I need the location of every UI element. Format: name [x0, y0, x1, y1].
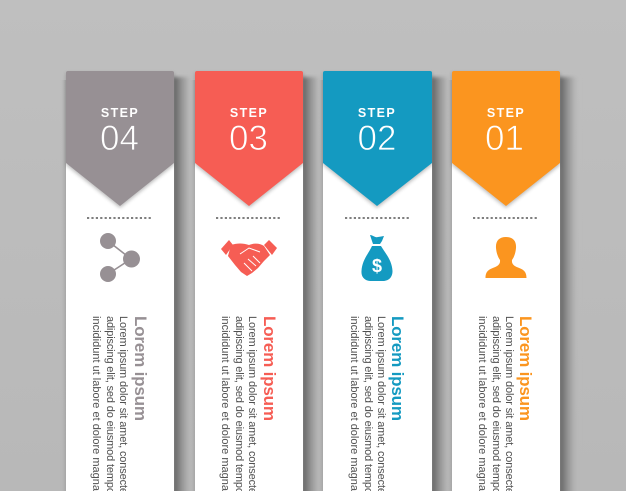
body text: adipiscing elit, sed do eiusmod tempo [490, 316, 502, 491]
body text [90, 316, 129, 491]
body text: incididunt ut labore et dolore magna [476, 316, 488, 491]
body text [219, 316, 258, 491]
panel: step 03 [189, 71, 322, 491]
body text [476, 316, 515, 491]
body text: adipiscing elit, sed do eiusmod tempo [362, 316, 374, 491]
step number: 04 [100, 119, 139, 158]
heading: Lorem ipsum [388, 316, 407, 421]
banner [195, 71, 303, 206]
step label: STEP [487, 106, 525, 120]
step label: STEP [358, 106, 396, 120]
step label: STEP [230, 106, 268, 120]
body text: adipiscing elit, sed do eiusmod tempo [104, 316, 116, 491]
step number: 01 [485, 119, 524, 158]
body text: incididunt ut labore et dolore magna [90, 316, 102, 491]
icon: handshake [221, 240, 277, 276]
icon: money bag: $ [372, 256, 382, 276]
panel: step 04 [60, 71, 193, 491]
banner [66, 71, 174, 206]
body text: Lorem ipsum dolor sit amet, consecte [117, 316, 129, 491]
step number: 03 [229, 119, 268, 158]
body text: incididunt ut labore et dolore magna [219, 316, 231, 491]
body text: incididunt ut labore et dolore magna [348, 316, 360, 491]
heading: Lorem ipsum [516, 316, 535, 421]
step label: STEP [101, 106, 139, 120]
step number: 02 [358, 119, 396, 158]
body text [348, 316, 387, 491]
banner [452, 71, 560, 206]
body text: Lorem ipsum dolor sit amet, consecte [503, 316, 515, 491]
heading: Lorem ipsum [131, 316, 150, 421]
icon: person [486, 237, 526, 278]
icon: share nodes [100, 233, 140, 282]
panel: step 02 [317, 71, 451, 491]
heading: Lorem ipsum [260, 316, 279, 421]
body text: adipiscing elit, sed do eiusmod tempo [233, 316, 245, 491]
panel: step 01 [446, 71, 579, 491]
banner [323, 71, 432, 206]
body text: Lorem ipsum dolor sit amet, consecte [375, 316, 387, 491]
icon: money bag [361, 235, 392, 281]
body text: Lorem ipsum dolor sit amet, consecte [246, 316, 258, 491]
